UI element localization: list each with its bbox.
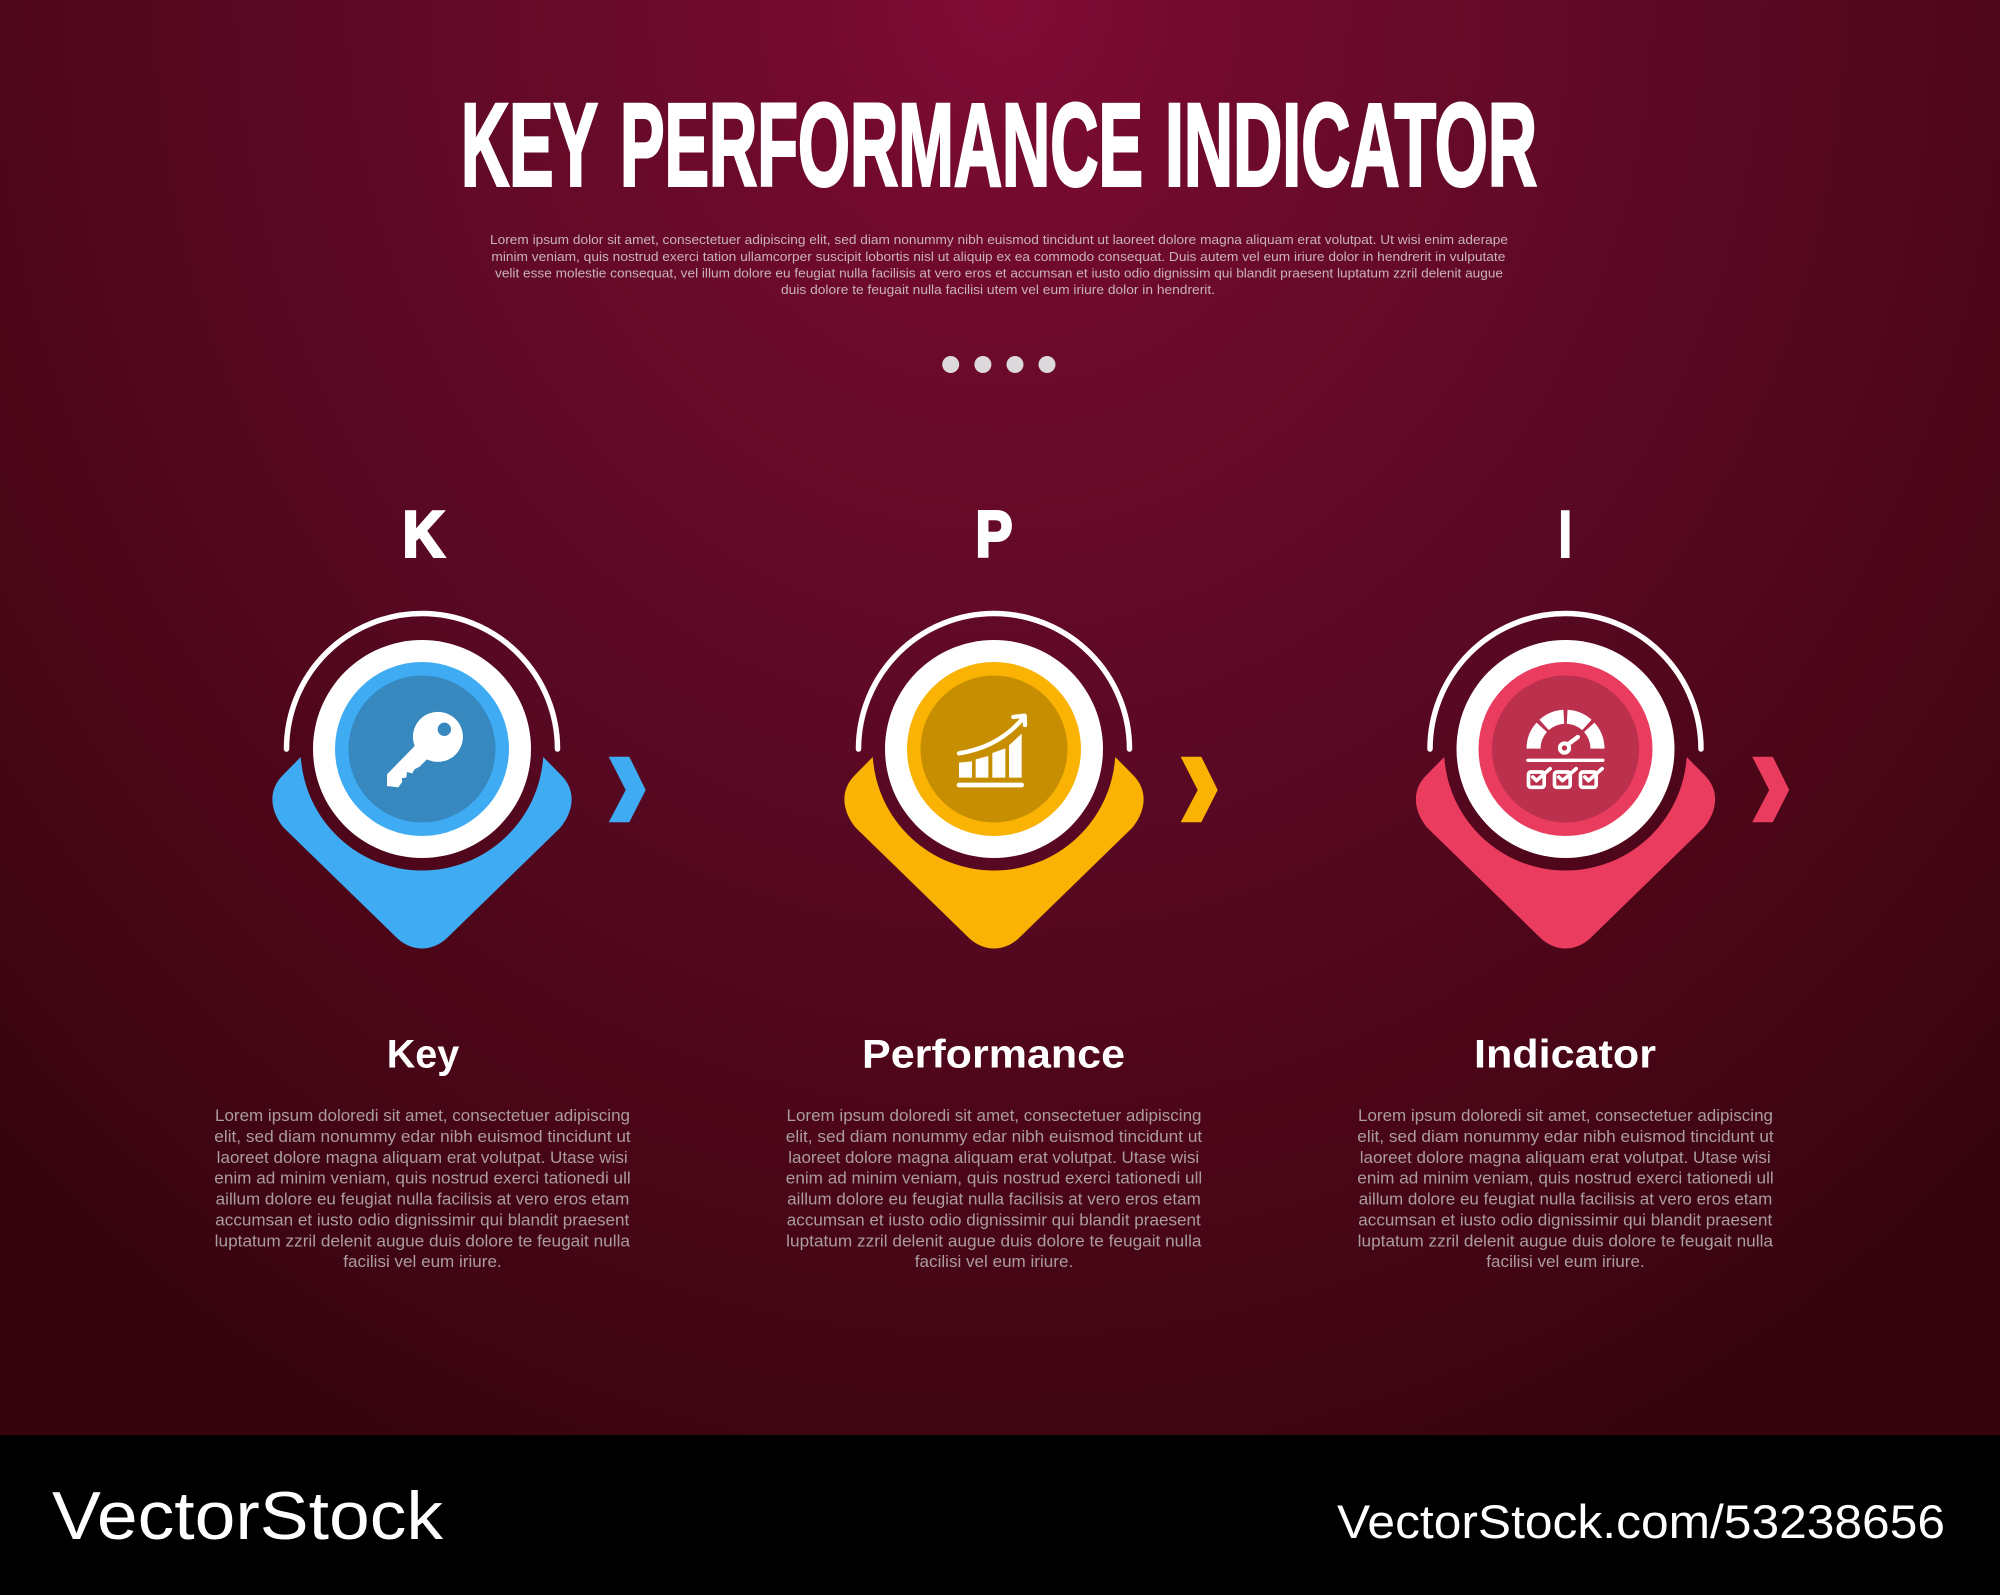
arrow chevron: [1752, 757, 1789, 822]
intro text block: [490, 232, 1508, 297]
body text: facilisi vel eum iriure.: [343, 1252, 502, 1271]
footer url: VectorStock.com/53238656: [1337, 1495, 1945, 1548]
icon: growth chart: [959, 716, 1025, 785]
intro text block: duis dolore te feugait nulla facilisi utem vel eum iriure dolor in hendrerit.: [781, 282, 1215, 297]
body text: Lorem ipsum doloredi sit amet, consectetuer adipiscing: [215, 1106, 630, 1125]
letter P: P: [976, 498, 1012, 570]
body text: accumsan et iusto odio dignissimir qui blandit praesent: [215, 1210, 630, 1230]
body text: laoreet dolore magna aliquam erat volutpat. Utase wisi: [788, 1148, 1199, 1167]
coloured disc: [907, 662, 1081, 836]
body text: accumsan et iusto odio dignissimir qui blandit praesent: [787, 1210, 1201, 1230]
coloured disc: [1478, 662, 1652, 836]
body text: elit, sed diam nonummy edar nibh euismod tincidunt ut: [214, 1127, 631, 1146]
body text: laoreet dolore magna aliquam erat volutpat. Utase wisi: [1360, 1148, 1771, 1167]
body text: Lorem ipsum doloredi sit amet, consectetuer adipiscing: [1358, 1106, 1773, 1125]
inner disc: [348, 676, 496, 822]
body text: aillum dolore eu feugiat nulla facilisis at vero eros etam: [1359, 1190, 1772, 1209]
body text: [1357, 1106, 1774, 1271]
title: KEY: [461, 80, 598, 212]
body text: facilisi vel eum iriure.: [1486, 1252, 1645, 1271]
intro text block: velit esse molestie consequat, vel illum dolore eu feugiat nulla facilisis at vero eros et accumsan et iusto odio dignissim qui blandit praesent luptatum zzril delenit augue: [495, 266, 1503, 280]
heading: Indicator: [1474, 1033, 1656, 1077]
body text: [214, 1106, 631, 1271]
body text: enim ad minim veniam, quis nostrud exerci tationedi ull: [786, 1169, 1202, 1188]
body text: luptatum zzril delenit augue duis dolore te feugait nulla: [1358, 1231, 1774, 1250]
panel: indicator: [1357, 498, 1789, 1271]
top arc: [1430, 614, 1701, 749]
white ring: [885, 640, 1103, 858]
heading: Key: [387, 1033, 460, 1077]
white ring: [1456, 640, 1674, 858]
arrow chevron: [1181, 757, 1218, 822]
body text: luptatum zzril delenit augue duis dolore te feugait nulla: [786, 1231, 1202, 1250]
body text: luptatum zzril delenit augue duis dolore te feugait nulla: [215, 1231, 631, 1250]
diamond base: [844, 757, 1144, 948]
icon: key: [387, 712, 463, 787]
diamond base: [1416, 757, 1715, 948]
body text: enim ad minim veniam, quis nostrud exerci tationedi ull: [214, 1169, 631, 1188]
title: INDICATOR: [1165, 80, 1537, 212]
body text: Lorem ipsum doloredi sit amet, consectetuer adipiscing: [786, 1106, 1202, 1125]
title: PERFORMANCE: [620, 80, 1143, 212]
body text: laoreet dolore magna aliquam erat volutpat. Utase wisi: [217, 1148, 628, 1167]
top arc: [286, 614, 558, 749]
pagination dots: [942, 356, 1056, 373]
body text: enim ad minim veniam, quis nostrud exerci tationedi ull: [1357, 1169, 1774, 1188]
body text: elit, sed diam nonummy edar nibh euismod tincidunt ut: [786, 1127, 1202, 1146]
arrow chevron: [609, 757, 646, 822]
inner disc: [920, 676, 1068, 822]
heading: Performance: [862, 1033, 1125, 1077]
panel: key: [214, 498, 646, 1271]
body text: aillum dolore eu feugiat nulla facilisis at vero eros etam: [216, 1190, 629, 1209]
body text: facilisi vel eum iriure.: [915, 1252, 1073, 1271]
body text: accumsan et iusto odio dignissimir qui blandit praesent: [1358, 1210, 1773, 1230]
icon: speedometer with checkboxes: [1528, 717, 1603, 787]
footer wordmark: VectorStock: [52, 1478, 444, 1554]
coloured disc: [335, 662, 509, 836]
diamond base: [272, 757, 572, 948]
body text: [786, 1106, 1202, 1271]
panel: performance: [786, 498, 1218, 1271]
letter K: K: [402, 498, 445, 570]
top arc: [858, 614, 1130, 749]
inner disc: [1492, 676, 1639, 822]
intro text block: Lorem ipsum dolor sit amet, consectetuer adipiscing elit, sed diam nonummy nibh euismod tincidunt ut laoreet dolore magna aliquam erat volutpat. Ut wisi enim aderape: [490, 232, 1508, 247]
white ring: [313, 640, 531, 858]
footer bar: [0, 1435, 2000, 1595]
body text: aillum dolore eu feugiat nulla facilisis at vero eros etam: [787, 1190, 1201, 1209]
intro text block: minim veniam, quis nostrud exerci tation ullamcorper suscipit lobortis nisl ut aliquip ex ea commodo consequat. Duis autem vel eum iriure dolor in hendrerit in vulputate: [491, 249, 1505, 264]
letter I: I: [1559, 498, 1572, 570]
body text: elit, sed diam nonummy edar nibh euismod tincidunt ut: [1357, 1127, 1774, 1146]
